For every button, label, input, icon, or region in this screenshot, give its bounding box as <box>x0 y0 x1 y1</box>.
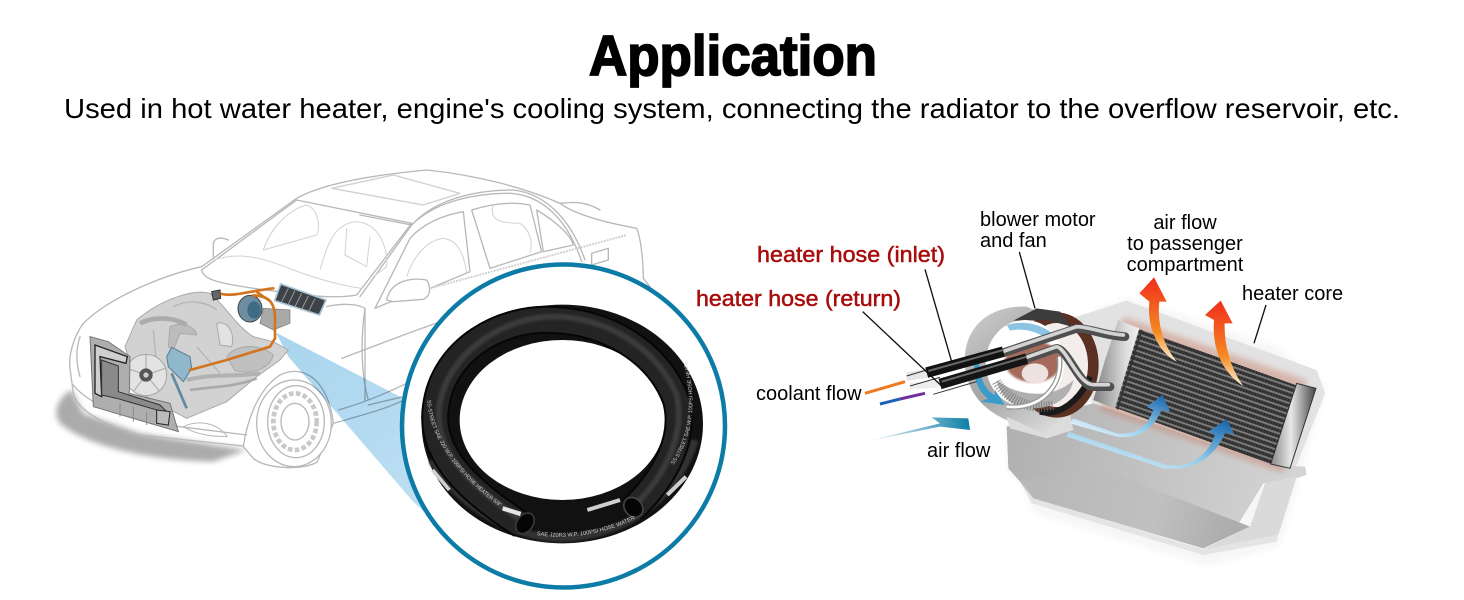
hot air arrow 2 <box>1205 301 1243 386</box>
heater core fins <box>1103 323 1300 465</box>
fan blades <box>997 380 1073 409</box>
tray halo <box>1007 297 1327 567</box>
motor hub center <box>1022 363 1048 383</box>
subtitle: Used in hot water heater, engine's cooling system, connecting the radiator to the overflow reservoir, etc. <box>64 93 1400 124</box>
mini blower <box>212 290 290 330</box>
silver ring highlight <box>1007 357 1060 407</box>
blower volute <box>965 307 1077 435</box>
tray basin <box>1020 473 1250 548</box>
engine block <box>125 292 288 418</box>
hot air arrow 1 <box>1139 277 1177 362</box>
back coil sheen <box>432 440 695 538</box>
leader lines <box>863 252 1266 386</box>
white tag mid <box>587 500 620 510</box>
blower swirl arrow lower <box>974 352 1005 405</box>
radiator <box>90 337 178 432</box>
title: Application <box>589 24 877 88</box>
label: blower motor and fan: and fan <box>980 230 1047 252</box>
motor ring <box>1020 318 1093 412</box>
hot coolant flow arrow <box>865 382 905 393</box>
hose print: SS-STREET SAE W.P. 100PSI HOSE HEATER <box>671 361 692 464</box>
coil base <box>422 305 703 543</box>
white tag left <box>503 508 521 514</box>
pipe lower <box>1027 347 1110 387</box>
fan blade lines <box>997 382 1053 407</box>
fan drum <box>986 320 1064 407</box>
cut end left <box>512 509 538 537</box>
housing front wall <box>1007 403 1307 548</box>
label: air flow to passenger compartment: to passenger <box>1127 233 1243 255</box>
label: coolant flow: coolant flow <box>756 383 862 405</box>
ground shadow <box>56 390 247 462</box>
silver ring <box>1007 357 1060 407</box>
water pump <box>167 347 192 382</box>
label: air flow: air flow <box>927 440 991 462</box>
hose ends and coolant lines <box>907 350 1027 394</box>
label: air flow to passenger compartment: compartment <box>1127 254 1244 276</box>
top blue swirl <box>1007 323 1057 337</box>
tray right side <box>1203 477 1297 549</box>
blower base <box>1007 413 1073 438</box>
front strand edge <box>435 320 679 525</box>
white tag lower <box>433 470 449 490</box>
core glow <box>1100 317 1307 473</box>
hose print: SAE J20R3 W.P. 100PSI HOSE WATER <box>537 516 635 537</box>
hose coil <box>421 304 703 544</box>
motor hub <box>1005 341 1062 382</box>
cool air stream 2 <box>1067 419 1234 469</box>
motor top cap <box>1013 308 1072 327</box>
cold coolant flow arrow <box>880 393 925 404</box>
hose print: SS-STREET SAE J20 W.P. 100PSI HOSE HEATER 5/8" ID <box>427 400 502 506</box>
pipe upper <box>1003 327 1125 353</box>
heater assembly illustration <box>863 252 1327 567</box>
white tag right <box>667 477 686 495</box>
tray lower lip <box>1020 482 1278 555</box>
tray back wall <box>1067 301 1325 473</box>
lower ring shadow <box>1040 377 1090 413</box>
circle frame <box>402 264 725 588</box>
orange hoses <box>190 288 275 370</box>
front strand <box>435 320 679 525</box>
cooling fan <box>125 354 167 396</box>
blue projection beam <box>276 333 470 557</box>
label: air flow to passenger compartment: air flow <box>1153 212 1217 234</box>
fog lamp <box>183 423 227 437</box>
car body outline <box>70 170 655 468</box>
tank edge <box>1117 330 1142 409</box>
cut end right <box>620 494 647 521</box>
cool air stream 1 <box>1070 395 1170 437</box>
label: heater hose return: heater hose (return) <box>696 286 901 311</box>
incoming air flow arrow <box>865 417 970 442</box>
coolant tube <box>172 373 187 408</box>
front wheel <box>257 380 331 467</box>
label: blower motor and fan: blower motor <box>980 209 1096 231</box>
front strand highlight <box>439 317 679 518</box>
car cutaway illustration <box>56 170 655 557</box>
mini heater core <box>275 284 326 315</box>
label: heater hose inlet: heater hose (inlet) <box>757 242 945 267</box>
core right tank <box>1271 383 1316 468</box>
core left tank <box>1093 320 1139 408</box>
magnified hose circle <box>400 262 728 590</box>
seats and interior <box>213 203 627 288</box>
label: heater core: heater core <box>1242 283 1343 305</box>
